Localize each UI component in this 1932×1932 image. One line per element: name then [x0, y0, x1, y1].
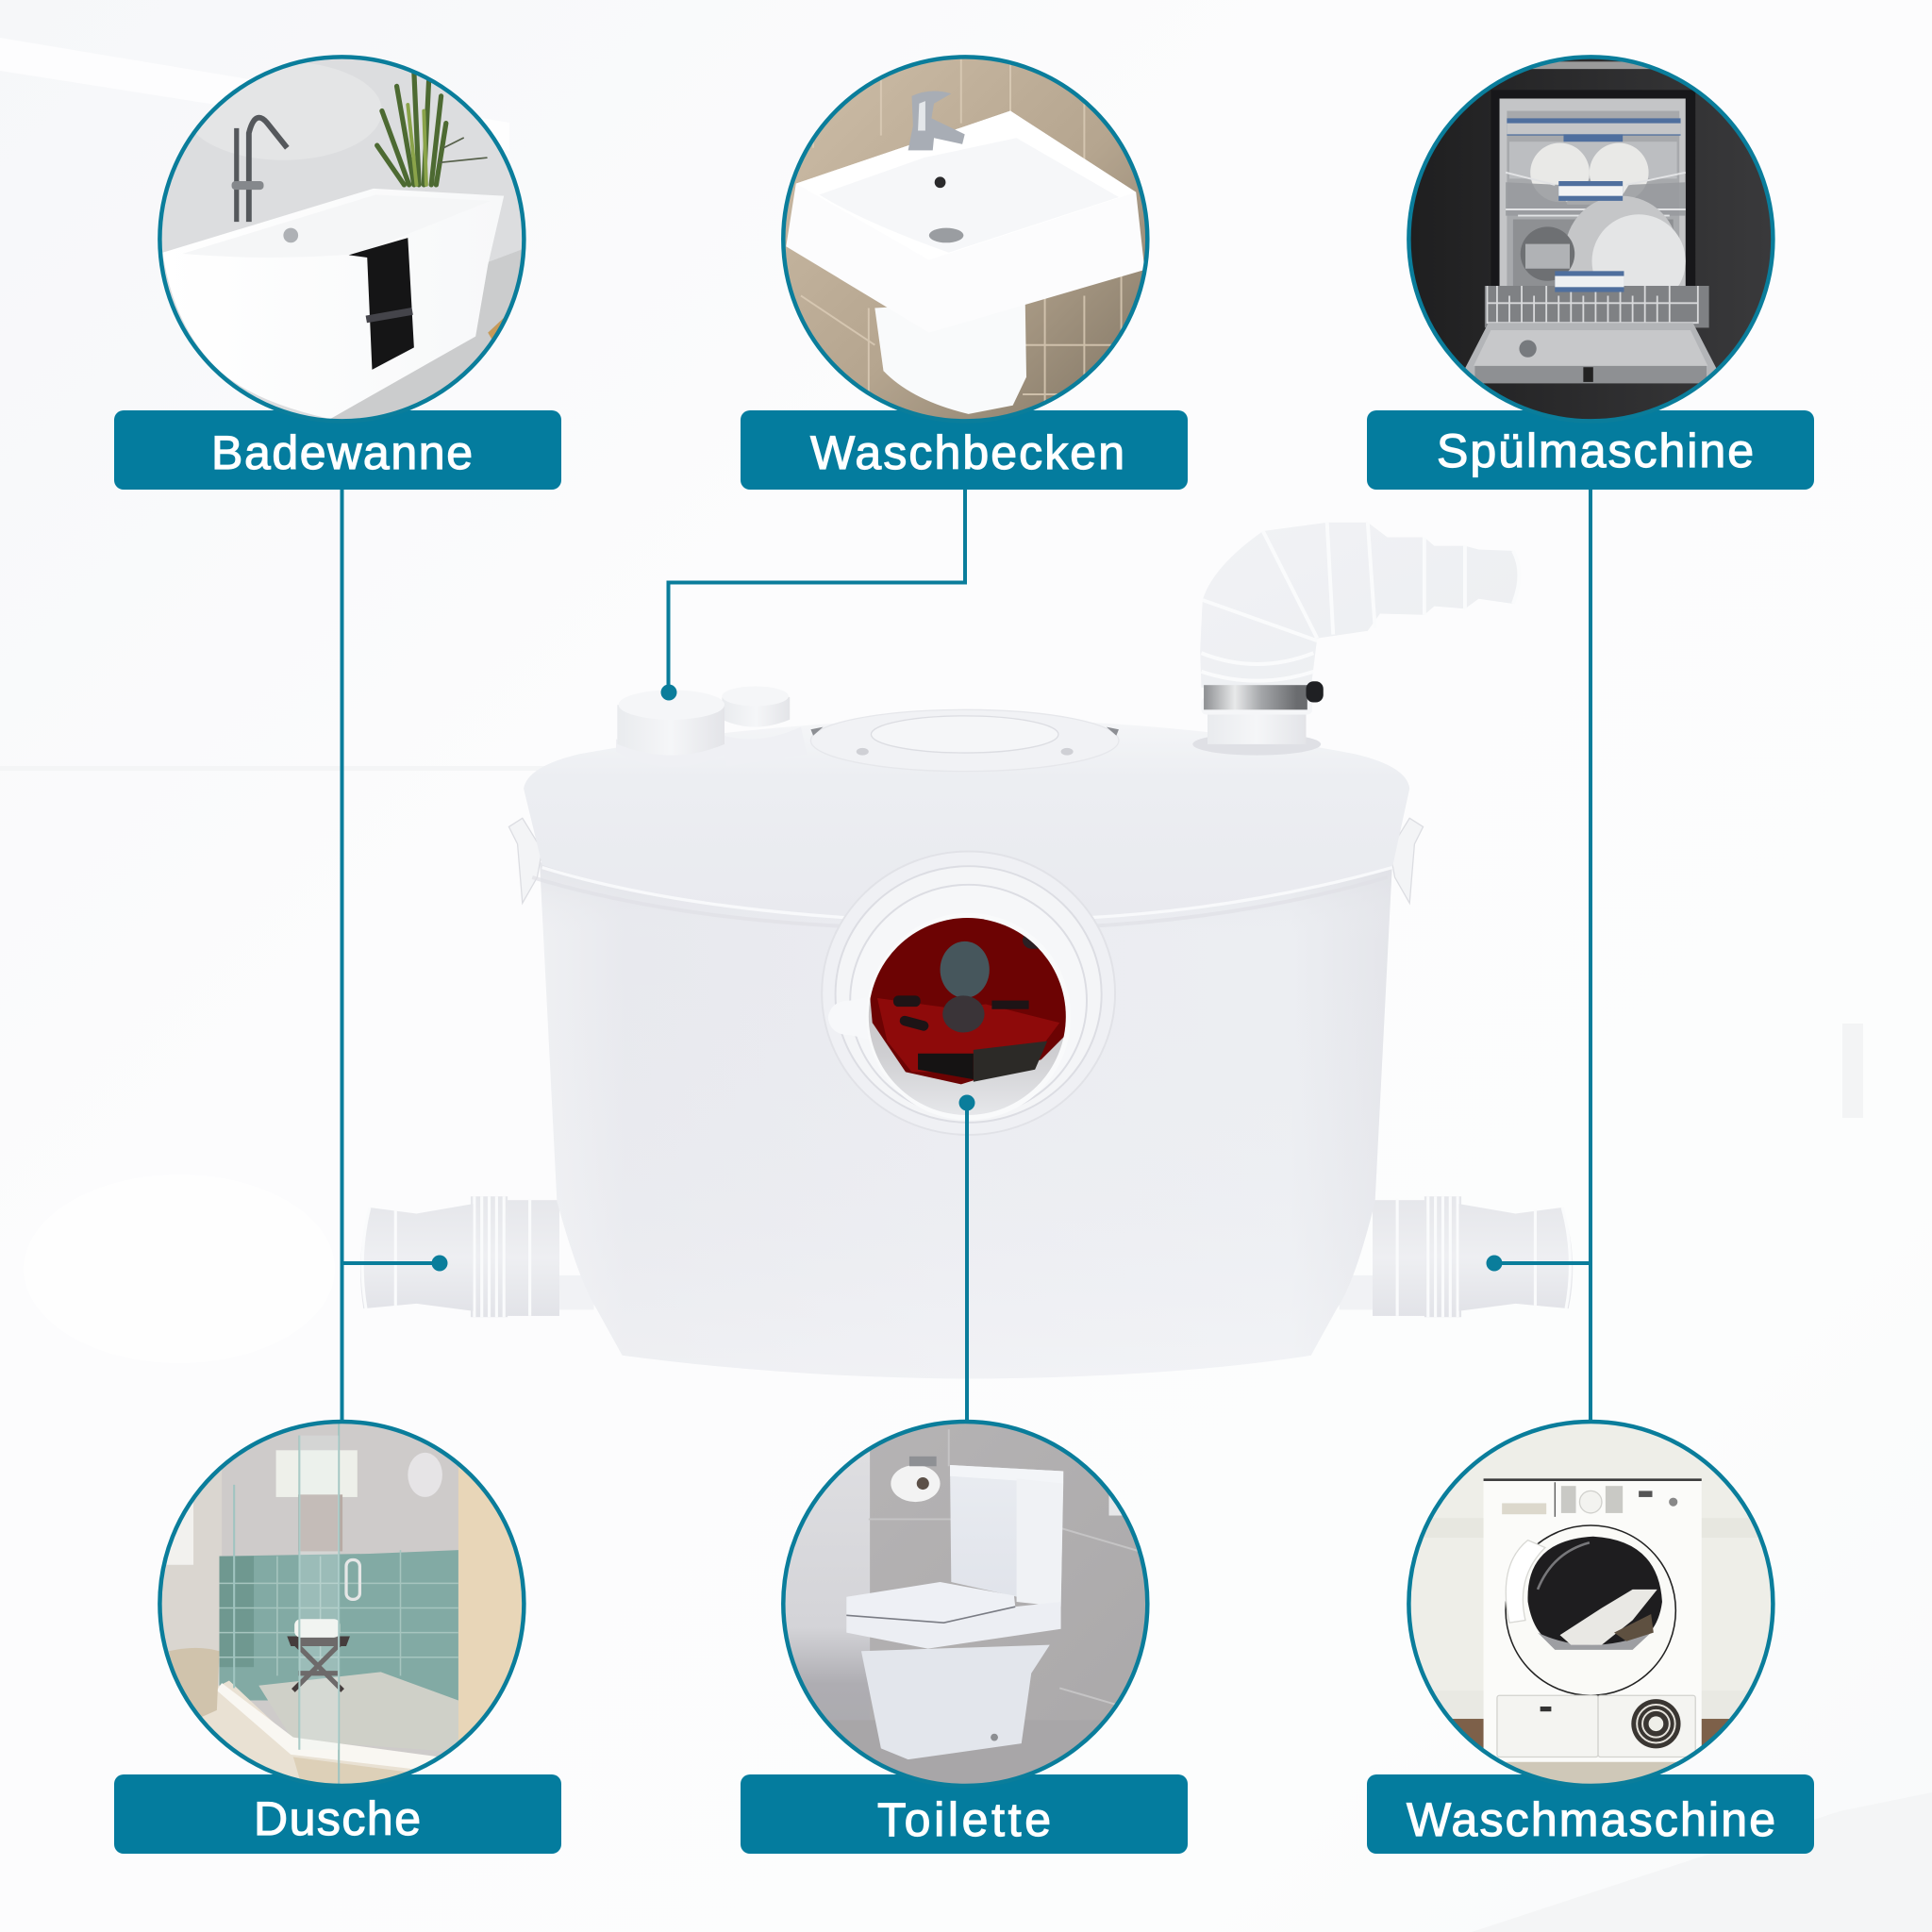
toilet inlet coupling — [822, 852, 1115, 1135]
right inlet pipe — [1340, 1196, 1573, 1317]
circle ring — [159, 57, 524, 421]
line: Badewanne and Dusche to left inlet — [341, 489, 440, 1426]
panel: Waschmaschine — [1367, 1417, 1814, 1854]
circle ring — [783, 57, 1147, 421]
circle ring — [159, 1422, 524, 1786]
photo: toilet — [785, 1424, 1145, 1784]
label bar: Spülmaschine — [1367, 410, 1814, 490]
photo: wash basin — [785, 58, 1145, 419]
photo: shower — [162, 1424, 523, 1784]
label bar: Badewanne — [114, 410, 561, 490]
heading: Spülmaschine: Spülmaschine — [1437, 425, 1754, 477]
circle ring — [1408, 57, 1773, 421]
label bar: Dusche — [114, 1774, 561, 1854]
hose clamp — [1204, 681, 1324, 709]
line: Toilette to front inlet — [965, 1103, 969, 1426]
panel: Badewanne — [114, 49, 561, 490]
label bar: Waschbecken — [741, 410, 1188, 490]
panel: Spülmaschine — [1367, 49, 1814, 490]
photo: washing machine — [1411, 1424, 1771, 1784]
heading: Dusche: Dusche — [254, 1792, 421, 1845]
elbow outlet — [1192, 523, 1521, 756]
product: macerator pump — [360, 523, 1573, 1379]
panel: Dusche — [114, 1417, 561, 1854]
tank lid — [524, 718, 1409, 926]
heading: Waschmaschine: Waschmaschine — [1407, 1793, 1775, 1846]
side clips — [508, 818, 1424, 903]
connector dots — [432, 685, 1502, 1272]
tank body — [540, 862, 1392, 1379]
label bar: Toilette — [741, 1774, 1188, 1854]
circle ring — [783, 1422, 1147, 1786]
line: Waschbecken to top inlet — [668, 489, 965, 692]
circle ring — [1408, 1422, 1773, 1786]
photo: dishwasher — [1411, 58, 1772, 419]
heading: Toilette: Toilette — [877, 1793, 1051, 1846]
heading: Waschbecken: Waschbecken — [810, 426, 1124, 479]
line: Spülmaschine and Waschmaschine to right inlet — [1494, 489, 1591, 1426]
label bar: Waschmaschine — [1367, 1774, 1814, 1854]
left inlet pipe — [360, 1196, 594, 1317]
panel: Toilette — [741, 1417, 1188, 1854]
connector lines — [341, 489, 1591, 1426]
knobs — [616, 687, 808, 767]
photo: bathtub — [162, 58, 523, 419]
heading: Badewanne: Badewanne — [211, 426, 473, 479]
panel: Waschbecken — [741, 49, 1188, 490]
top plate — [810, 709, 1119, 772]
